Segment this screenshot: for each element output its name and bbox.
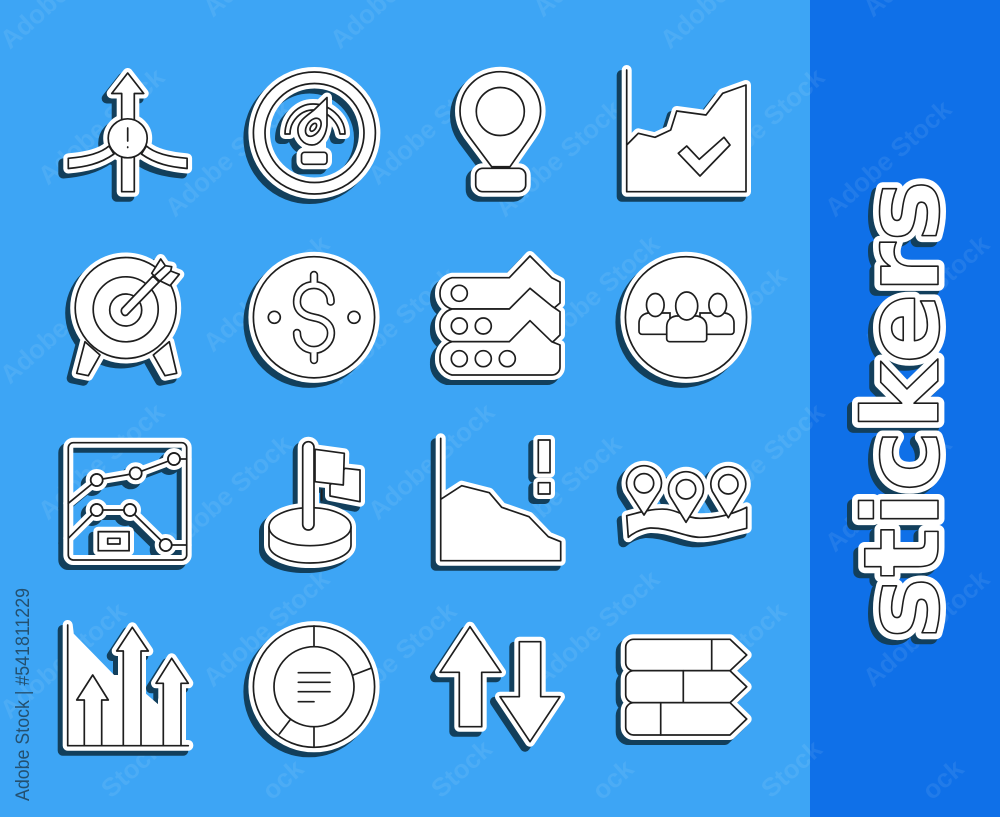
icon: stacked progress tags [621,639,747,740]
watermark pattern: Adobe Stock [692,61,831,190]
watermark pattern: Adobe Stock [32,396,171,525]
watermark pattern: Adobe Stock [197,563,336,692]
icon: target with arrow [70,258,179,381]
watermark pattern: Adobe Stock [489,428,628,557]
watermark pattern: Adobe Stock [527,563,666,692]
icon: rising area chart with check mark [622,70,746,197]
watermark pattern: Adobe Stock [159,93,298,222]
watermark pattern: Adobe Stock [197,228,336,357]
watermark pattern: Adobe Stock [857,228,996,357]
watermark pattern: Stock [425,733,498,803]
credit: vertical stock id: Adobe Stock | #541811229 [13,588,34,801]
icon: team of three people in a circle [620,257,747,383]
watermark pattern: Adobe Stock [159,428,298,557]
title: stickers: stickers [841,180,963,639]
watermark pattern: Adobe Stock [654,260,793,389]
watermark pattern: ock [916,753,970,805]
icon: three-way arrow junction with warning [63,73,187,197]
watermark pattern: Adobe Stock [819,93,958,222]
icon: up and down arrows [435,627,560,747]
watermark pattern: ock [256,753,310,805]
icon: rising arrows bar chart [63,625,188,751]
icon: falling area chart with exclamation [436,438,561,566]
watermark pattern: Adobe Stock [819,428,958,557]
icon: line chart in a frame [63,443,187,565]
watermark pattern: Adobe Stock [654,595,793,724]
watermark pattern: Adobe Stock [857,563,996,692]
icon: three pins on a road [622,466,747,542]
watermark pattern: Adobe Stock [527,228,666,357]
icon: donut chart with text [248,626,375,752]
watermark pattern: Adobe Stock [489,93,628,222]
title: stickers: stickers [841,180,963,639]
watermark pattern: Adobe Stock [324,260,463,389]
watermark pattern: ock [586,753,640,805]
panel: title sidebar [810,0,1000,817]
watermark pattern: Adobe Stock [362,61,501,190]
watermark pattern: Stock [95,733,168,803]
watermark pattern: Stock [755,733,828,803]
icon: server stack with rising arrows [435,256,560,380]
watermark pattern: Adobe Stock [324,595,463,724]
icon: gauge in a ring [248,72,375,199]
watermark pattern: Adobe Stock [692,396,831,525]
icon: location pin [455,72,541,197]
icon: dollar coin [248,257,375,383]
watermark pattern: Adobe Stock [362,396,501,525]
icon: flag on a round base [264,442,360,568]
watermark pattern: Adobe Stock [32,61,171,190]
title: stickers: stickers [836,185,958,644]
